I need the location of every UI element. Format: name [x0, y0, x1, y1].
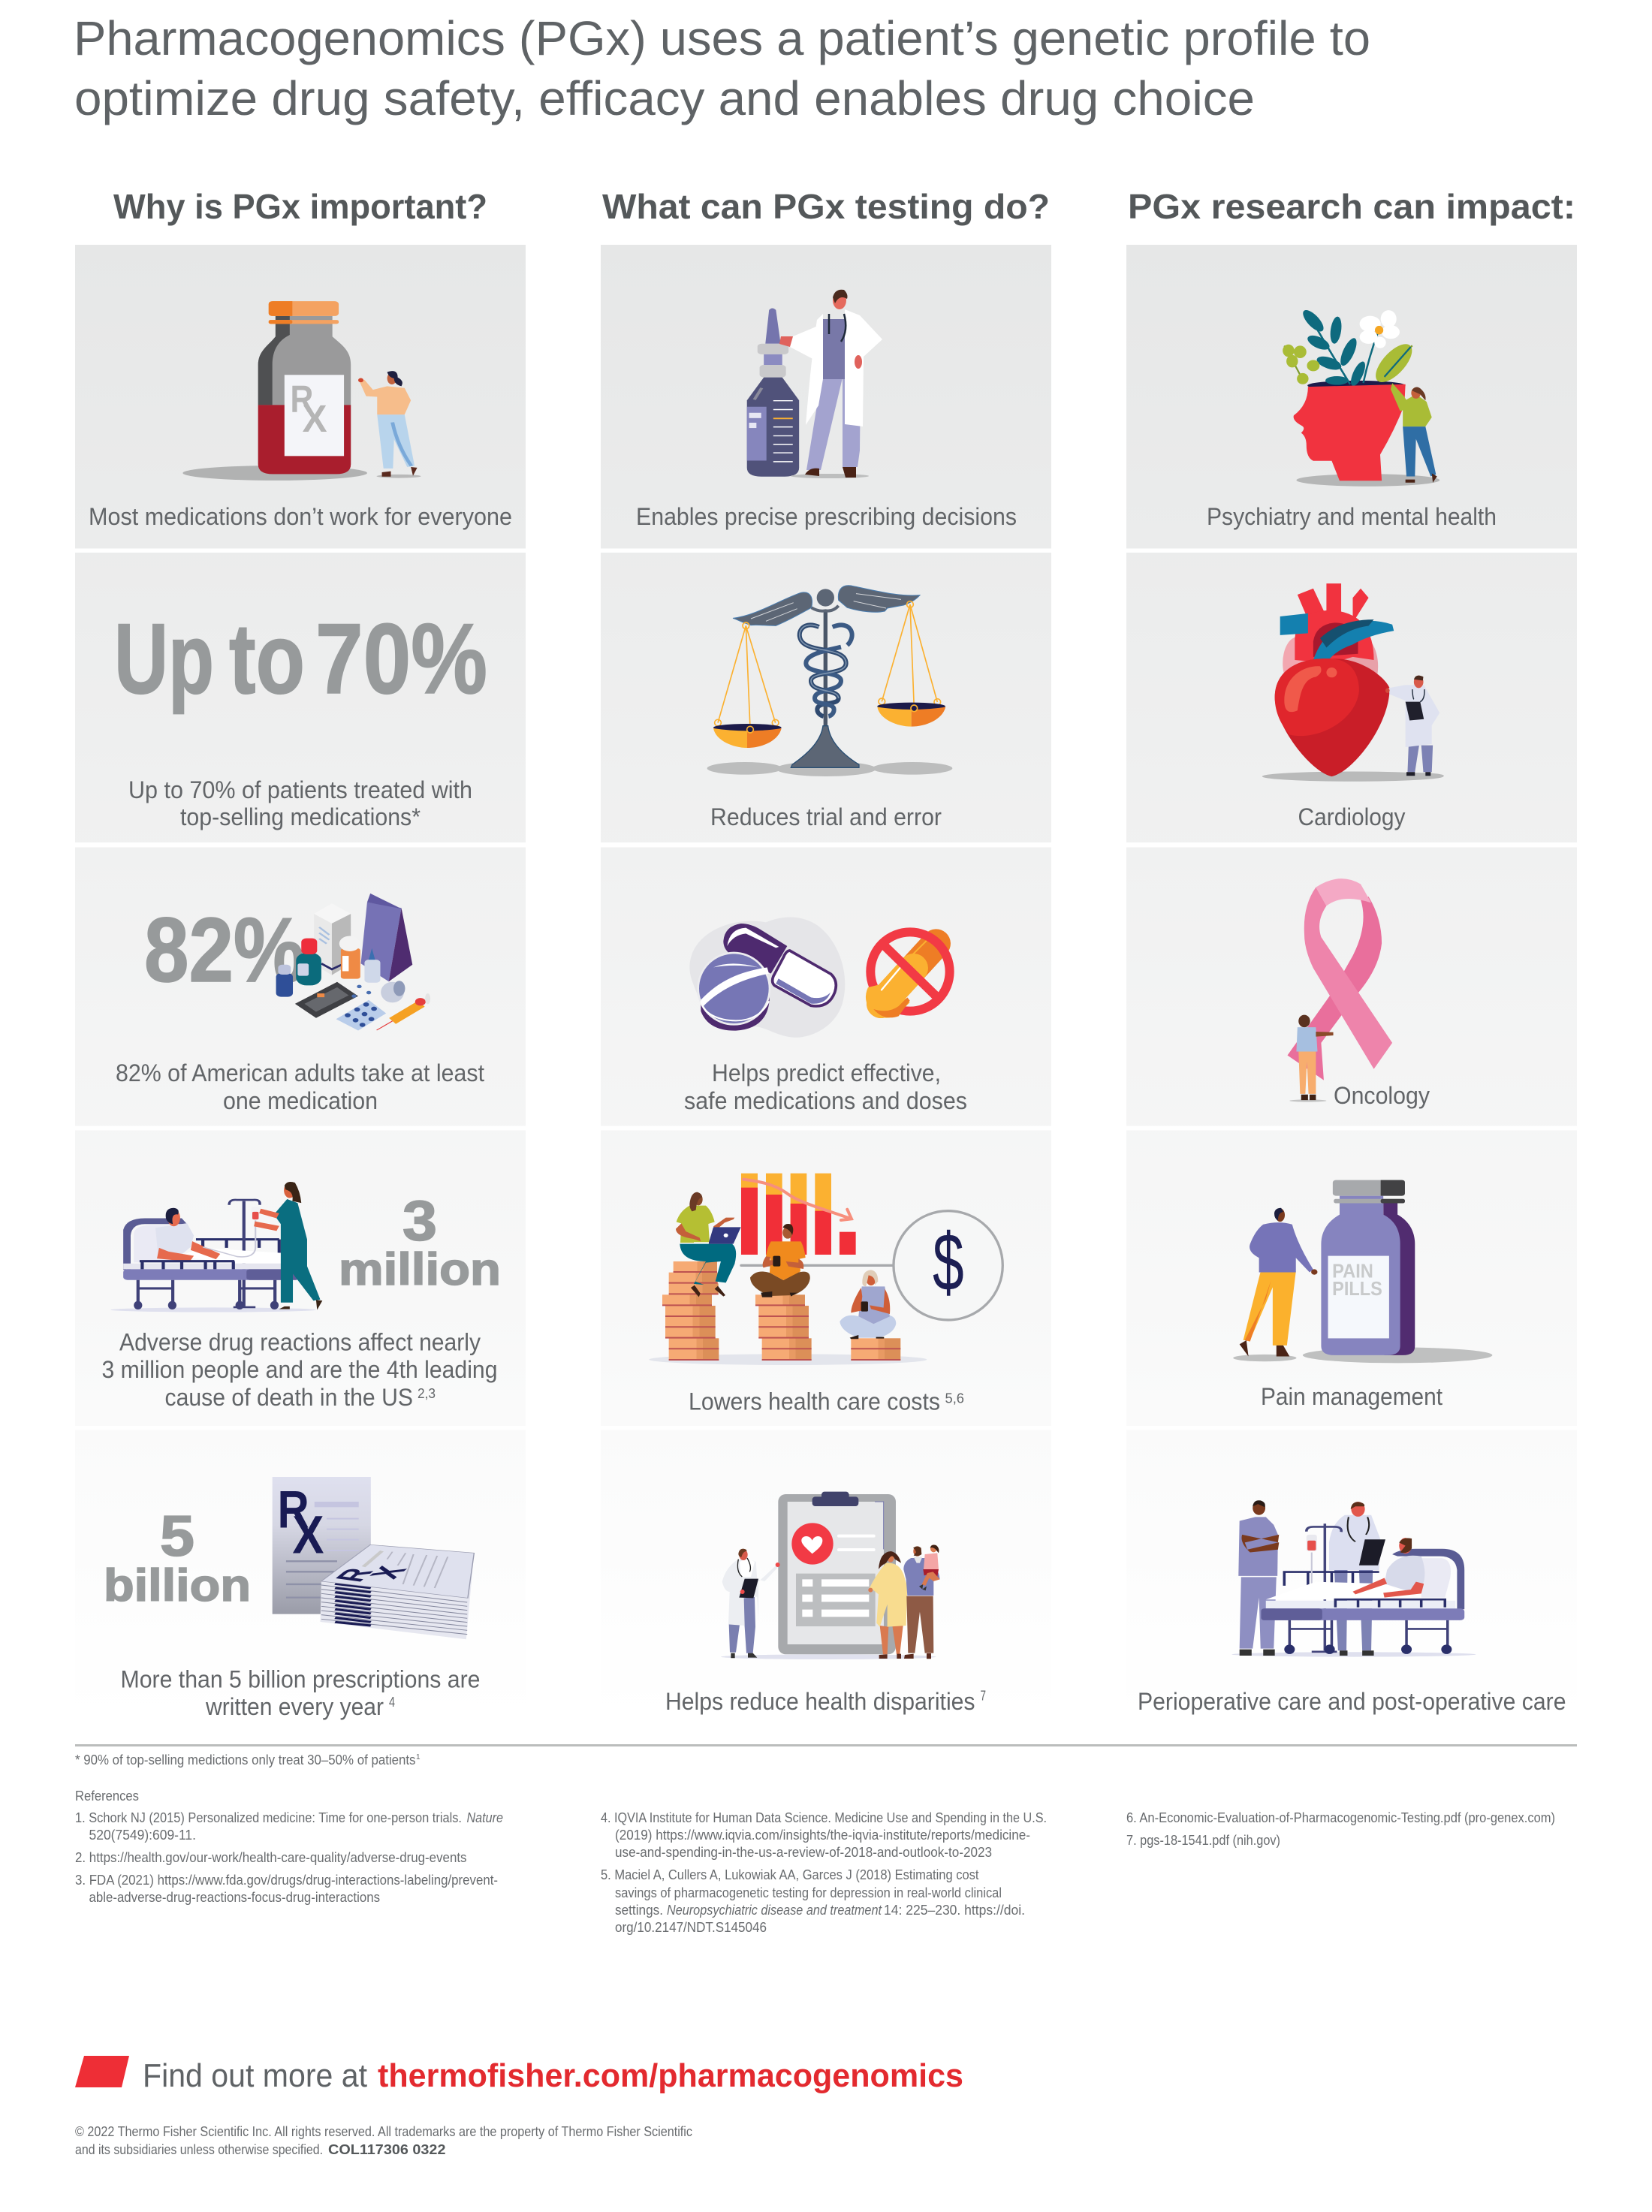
- icon: pain pills bottle with man: PAIN: [1332, 1261, 1373, 1282]
- panel: up to 70%: [75, 553, 526, 842]
- icon: caduceus scales: [707, 586, 952, 776]
- references column 1: 3. FDA (2021) https://www.fda.gov/drugs/drug-interactions-labeling/prevent-: [75, 1873, 498, 1888]
- footnote: 1: [416, 1753, 421, 1761]
- logo mark: red parallelogram: [75, 2056, 129, 2087]
- references column 1: 1. Schork NJ (2015) Personalized medicine: Time for one-person trials.: [75, 1810, 462, 1825]
- big number: [104, 1505, 251, 1611]
- references heading: References: [75, 1789, 139, 1804]
- copyright: [75, 2124, 692, 2157]
- copyright: COL117306 0322: [328, 2142, 446, 2157]
- title: Pharmacogenomics (PGx) uses a patient’s genetic profile to: [74, 11, 1370, 65]
- caption: one medication: [223, 1087, 378, 1114]
- caption: Up to 70% of patients treated with: [128, 776, 472, 803]
- icon: prescriptions: [273, 1477, 474, 1639]
- panel: perioperative: [1126, 1430, 1577, 1719]
- references column 3: [1126, 1810, 1555, 1848]
- panel: 3 million: [75, 1131, 526, 1426]
- big number: [339, 1189, 501, 1294]
- references column 1: able-adverse-drug-reactions-focus-drug-interactions: [89, 1890, 380, 1905]
- big number: Up: [114, 604, 214, 715]
- icon: dropper bottle: [747, 309, 799, 477]
- panel: enables precise prescribing: [601, 245, 1051, 548]
- copyright: © 2022 Thermo Fisher Scientific Inc. All rights reserved. All trademarks are the property of Thermo Fisher Scientific: [75, 2124, 692, 2139]
- icon: hospital bed scene: [1231, 1500, 1476, 1657]
- caption: [102, 1329, 497, 1411]
- caption: 7: [981, 1688, 986, 1703]
- caption: [116, 1059, 484, 1114]
- caption: Perioperative care and post-operative care: [1138, 1688, 1566, 1715]
- references column 2: use-and-spending-in-the-us-a-review-of-2018-and-outlook-to-2023: [615, 1845, 992, 1860]
- caption: More than 5 billion prescriptions are: [120, 1665, 481, 1692]
- caption: Pain management: [1261, 1383, 1442, 1410]
- references column 1: 2. https://health.gov/our-work/health-care-quality/adverse-drug-events: [75, 1850, 467, 1865]
- icon: pills and no-sign capsule: [689, 917, 950, 1038]
- caption: cause of death in the US: [165, 1384, 413, 1411]
- caption: 82% of American adults take at least: [116, 1059, 484, 1086]
- icon: Rx bottle with woman: [182, 301, 421, 481]
- call to action: Find out more at: [143, 2057, 367, 2094]
- big number: to: [229, 604, 305, 715]
- big number: 82%: [144, 899, 305, 1001]
- panel: most medications: [75, 245, 526, 548]
- caption: [120, 1665, 481, 1720]
- rotated Rx on stack: R: [327, 1566, 381, 1584]
- title: optimize drug safety, efficacy and enables drug choice: [74, 71, 1255, 125]
- icon: medications isometric: [276, 894, 430, 1031]
- caption: Enables precise prescribing decisions: [636, 503, 1017, 530]
- caption: Lowers health care costs: [689, 1388, 940, 1415]
- caption: Helps predict effective,: [712, 1059, 941, 1086]
- references column 2: savings of pharmacogenetic testing for depression in real-world clinical: [615, 1885, 1002, 1900]
- panel: psychiatry: [1126, 245, 1577, 548]
- panel: cardiology: [1126, 553, 1577, 842]
- caption: 2,3: [418, 1386, 436, 1401]
- heading: what: What can PGx testing do?: [602, 187, 1050, 226]
- heading: why: Why is PGx important?: [113, 187, 487, 226]
- references column 1: 520(7549):609-11.: [89, 1828, 196, 1843]
- icon: prescriptions: X: [292, 1505, 324, 1564]
- icon: pink ribbon with woman: [1288, 878, 1392, 1102]
- rotated Rx on stack: X: [361, 1564, 415, 1581]
- caption: Oncology: [1334, 1082, 1430, 1109]
- references column 1: Nature: [467, 1810, 503, 1825]
- references column 2: Neuropsychiatric disease and treatment: [667, 1903, 882, 1918]
- references column 3: 6. An-Economic-Evaluation-of-Pharmacogenomic-Testing.pdf (pro-genex.com): [1126, 1810, 1555, 1825]
- icon: pain pills bottle with man: PILLS: [1332, 1279, 1382, 1300]
- icon: clipboard with doctor and family: [721, 1492, 940, 1659]
- big number: 3: [402, 1189, 437, 1252]
- caption: [128, 776, 472, 830]
- rotated Rx on stack: [327, 1564, 415, 1584]
- icon: pain pills bottle with man: [1233, 1180, 1492, 1363]
- references column 3: 7. pgs-18-1541.pdf (nih.gov): [1126, 1833, 1280, 1848]
- caption: [684, 1059, 967, 1114]
- icon: doctor: [779, 290, 882, 478]
- caption: 3 million people and are the 4th leading: [102, 1356, 497, 1383]
- copyright: and its subsidiaries unless otherwise specified.: [75, 2142, 323, 2157]
- references column 2: [601, 1810, 1047, 1935]
- big number: 70%: [315, 604, 487, 715]
- caption: safe medications and doses: [684, 1087, 967, 1114]
- references column 2: org/10.2147/NDT.S145046: [615, 1920, 767, 1935]
- caption: Reduces trial and error: [710, 803, 942, 830]
- caption: Helps reduce health disparities: [665, 1688, 975, 1715]
- footnote: * 90% of top-selling medictions only treat 30–50% of patients: [75, 1752, 416, 1767]
- big number: million: [339, 1244, 501, 1294]
- big number: 5: [160, 1505, 194, 1569]
- heading: impact: PGx research can impact:: [1128, 187, 1575, 226]
- icon: patient in bed with nurse: [110, 1182, 322, 1312]
- panel: lowers costs: [601, 1131, 1051, 1426]
- icon: Rx bottle with woman: X: [303, 396, 327, 440]
- caption: 4: [389, 1695, 395, 1710]
- big number: billion: [104, 1560, 251, 1611]
- panel: health disparities: [601, 1430, 1051, 1719]
- panel: oncology: [1126, 847, 1577, 1126]
- caption: top-selling medications*: [180, 803, 421, 830]
- big number: [114, 604, 487, 715]
- icon: heart with doctor: [1262, 583, 1444, 782]
- caption: Psychiatry and mental health: [1207, 503, 1497, 530]
- panel: predict effective: [601, 847, 1051, 1126]
- references column 2: 14: 225–230. https://doi.: [884, 1903, 1025, 1918]
- icon: prescriptions: R: [278, 1480, 309, 1538]
- caption: Most medications don’t work for everyone: [89, 503, 512, 530]
- icon: Rx bottle with woman: R: [291, 377, 313, 420]
- panel: 5 billion: [75, 1430, 526, 1720]
- references column 2: settings.: [615, 1903, 663, 1918]
- references column 2: (2019) https://www.iqvia.com/insights/the-iqvia-institute/reports/medicine-: [615, 1828, 1030, 1843]
- call to action: thermofisher.com/pharmacogenomics: [378, 2057, 963, 2094]
- references column 2: 5. Maciel A, Cullers A, Lukowiak AA, Garces J (2018) Estimating cost: [601, 1867, 979, 1882]
- caption: Adverse drug reactions affect nearly: [119, 1329, 481, 1356]
- references column 1: [75, 1810, 503, 1905]
- caption: written every year: [205, 1693, 384, 1720]
- references column 2: 4. IQVIA Institute for Human Data Science. Medicine Use and Spending in the U.S.: [601, 1810, 1047, 1825]
- icon: head with plants and woman: [1283, 306, 1439, 487]
- panel: reduces trial and error: [601, 553, 1051, 842]
- caption: Cardiology: [1298, 803, 1406, 830]
- caption: 5,6: [945, 1391, 964, 1406]
- title: [74, 11, 1370, 125]
- icon: coin stacks, bar chart, dollar: $: [933, 1217, 964, 1308]
- panel: 82%: [75, 847, 526, 1126]
- icon: coin stacks, bar chart, dollar: [649, 1174, 1002, 1365]
- panel: pain management: [1126, 1131, 1577, 1426]
